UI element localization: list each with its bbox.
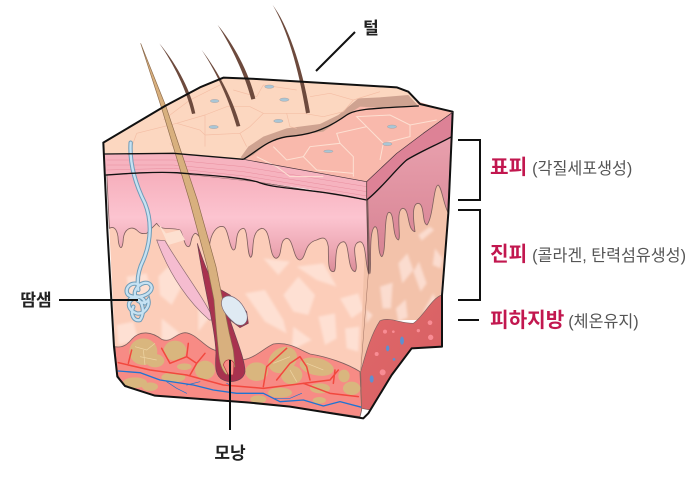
skin pores [209, 85, 397, 153]
panel: subcutaneous fat front [115, 333, 362, 417]
fat clusters [123, 338, 360, 404]
label: dermis: 진피 (콜라겐, 탄력섬유생성) [490, 243, 686, 266]
fat cell outlines [135, 343, 323, 382]
fat right spots [370, 320, 433, 383]
panel: peach upper skin surface [103, 78, 418, 159]
pale papilla above muscle [158, 223, 185, 245]
surface skin creases [130, 83, 380, 154]
panel: dermis papillae, front face [107, 172, 369, 274]
arrector pili muscle [157, 240, 214, 320]
leader: hair [316, 32, 355, 71]
right face pale texture [366, 227, 443, 323]
label: hair: 털 [363, 19, 379, 38]
gland inner tube [127, 143, 152, 320]
epidermis band lines [107, 160, 367, 196]
label: hair follicle: 모낭 [214, 444, 246, 463]
panel: dermis papillae, right face [368, 136, 452, 273]
panel: pink epidermis band, right [367, 112, 453, 200]
epidermis lines [104, 106, 418, 159]
panel: dermis front face [107, 173, 367, 372]
hair root papilla [223, 360, 234, 375]
hair: large shaft [141, 43, 235, 375]
blue vein [118, 371, 362, 407]
surface cell lines [257, 115, 437, 177]
outer contour [103, 78, 453, 418]
panel: exposed pink surface [243, 102, 453, 182]
bracket: dermis [458, 210, 480, 300]
panel: subcutaneous fat right face [361, 295, 442, 410]
top and right outline [103, 78, 453, 418]
leader: subcutaneous fat [458, 319, 479, 321]
sebaceous gland [221, 296, 247, 325]
label: sweat gland: 땀샘 [20, 291, 52, 310]
leader: sweat gland [59, 299, 138, 301]
hair: small strands [159, 5, 310, 127]
dermis pale texture [117, 258, 363, 352]
gland outer tube [127, 143, 152, 320]
panel: pink epidermis band, front [104, 153, 367, 200]
red blood vessels [118, 343, 358, 397]
bracket: epidermis [458, 140, 480, 200]
surface shadow edge [241, 95, 418, 159]
sweat gland [127, 143, 152, 320]
follicle [197, 243, 248, 382]
panel: dermis right face [360, 160, 452, 370]
label: epidermis: 표피 (각질세포생성) [490, 156, 632, 179]
leader: hair follicle [229, 360, 231, 430]
label: subcutaneous fat: 피하지방(체온유지) [490, 309, 639, 332]
skin cross-section illustration [103, 5, 453, 418]
